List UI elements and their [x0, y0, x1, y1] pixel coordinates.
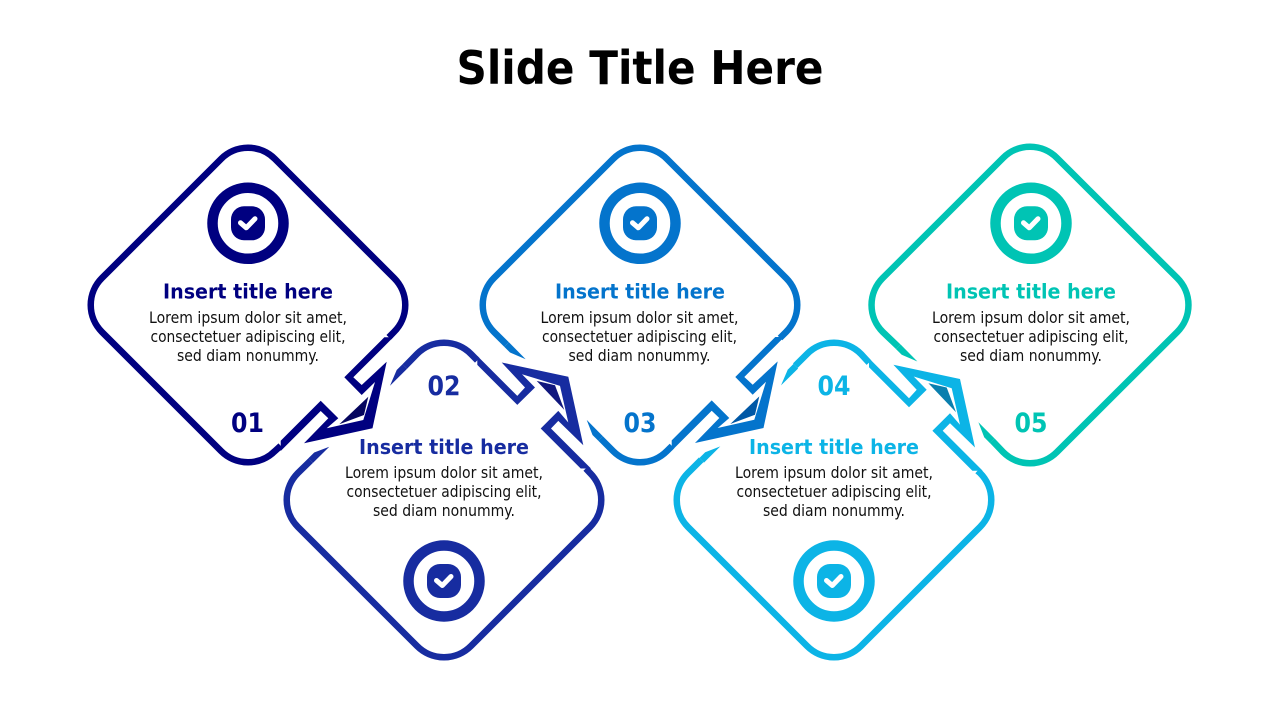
text block 05 [932, 308, 1130, 365]
icon: check badge 05 [996, 188, 1066, 259]
text block 02: consectetuer adipiscing elit, [346, 482, 542, 501]
title: Slide Title Here [456, 41, 824, 95]
text block 01: sed diam nonummy. [177, 346, 319, 365]
icon: check badge 03 [604, 188, 676, 259]
text block 03 [540, 308, 738, 365]
icon: check badge 02 [408, 546, 480, 616]
text block 02: Lorem ipsum dolor sit amet, [345, 463, 543, 482]
text block 04: Lorem ipsum dolor sit amet, [735, 463, 933, 482]
number 01: 01 [231, 408, 264, 439]
text block 05: sed diam nonummy. [960, 346, 1102, 365]
heading 03: Insert title here [555, 280, 725, 304]
text block 03: consectetuer adipiscing elit, [542, 327, 737, 346]
text block 04: consectetuer adipiscing elit, [736, 482, 932, 501]
text block 05: Lorem ipsum dolor sit amet, [932, 308, 1130, 327]
text block 04: sed diam nonummy. [763, 501, 905, 520]
panel: step 02 [287, 343, 601, 657]
heading 04: Insert title here [749, 435, 919, 459]
text block 03: sed diam nonummy. [568, 346, 710, 365]
panel: step 03 [483, 148, 797, 462]
number 05: 05 [1014, 408, 1048, 439]
number 03: 03 [624, 408, 656, 439]
number 04: 04 [818, 371, 850, 402]
diamond outline 02 [287, 343, 601, 657]
arrow: 02 to 03 [477, 356, 591, 468]
text block 03: Lorem ipsum dolor sit amet, [540, 308, 738, 327]
arrow: 04 to 05 [869, 358, 983, 471]
heading 01: Insert title here [163, 280, 333, 304]
text block 01: Lorem ipsum dolor sit amet, [149, 308, 347, 327]
diamond outline 05 [872, 147, 1188, 463]
gap ends 04 [699, 364, 798, 463]
diamond outline 03 [483, 148, 797, 462]
heading 02: Insert title here [359, 435, 529, 459]
icon: check badge 04 [798, 546, 870, 616]
text block 04 [735, 463, 933, 520]
diamond outline 01 [91, 148, 405, 462]
text block 02: sed diam nonummy. [373, 501, 515, 520]
heading 05: Insert title here [946, 280, 1116, 304]
arrow: 01 to 02 [281, 337, 393, 451]
diamond outline 04 [677, 343, 991, 657]
gap ends 02 [308, 364, 407, 463]
text block 05: consectetuer adipiscing elit, [934, 327, 1128, 346]
panel: step 05 [872, 147, 1188, 463]
panel: step 01 [91, 148, 405, 462]
text block 01: consectetuer adipiscing elit, [150, 327, 346, 346]
icon: check badge 01 [212, 188, 284, 259]
arrow: 03 to 04 [672, 337, 784, 451]
gap ends 03 [504, 342, 603, 441]
gap ends 05 [896, 344, 995, 443]
text block 01 [149, 308, 347, 365]
panel: step 04 [677, 343, 991, 657]
text block 02 [345, 463, 543, 520]
number 02: 02 [428, 371, 460, 402]
